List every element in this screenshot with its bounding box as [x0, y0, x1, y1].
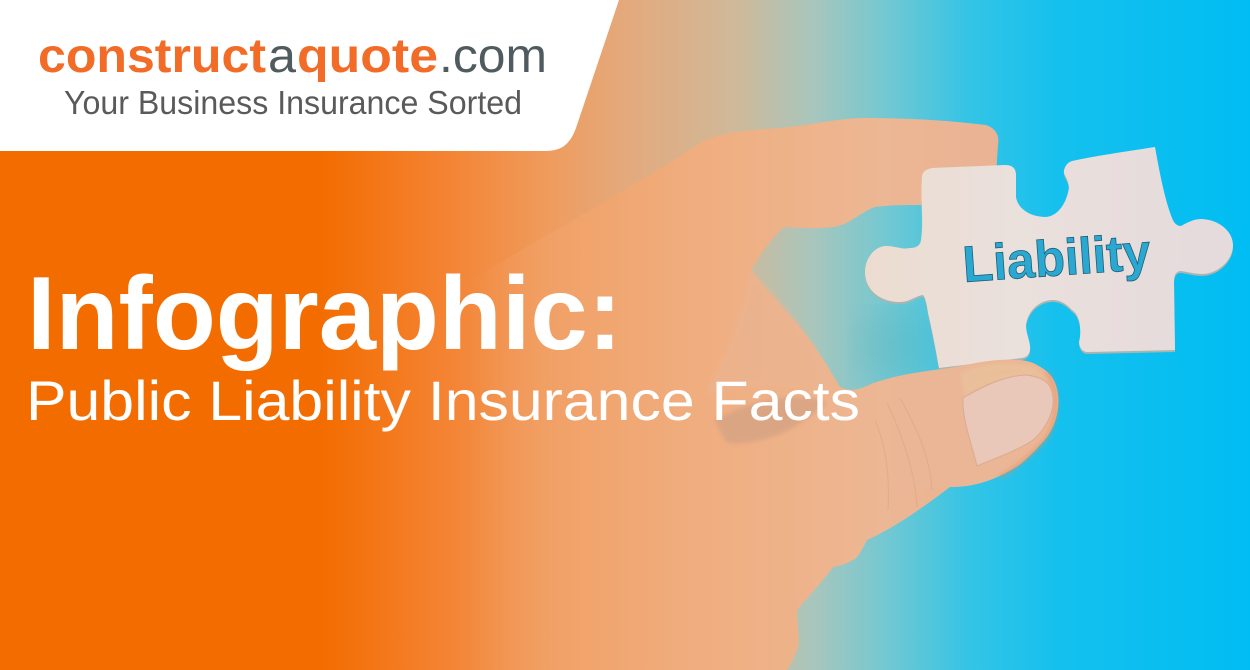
hand silhouette [420, 118, 1058, 670]
fold between fingers [714, 397, 827, 443]
puzzle label: Liability [961, 223, 1153, 293]
photo: hand holding puzzle piece [420, 118, 1233, 670]
white panel shape [0, 0, 619, 151]
subtitle: Public Liability Insurance Facts [26, 369, 860, 432]
thumb creases [875, 398, 932, 510]
puzzle piece [865, 147, 1233, 370]
thumbnail [963, 375, 1053, 466]
thumb [875, 360, 1058, 510]
thumb tip [900, 360, 1058, 487]
shadow behind puzzle piece [855, 311, 935, 379]
logo tagline: Your Business Insurance Sorted [64, 84, 522, 121]
logo wordmark: a [268, 30, 296, 83]
callus above nail [960, 364, 1048, 396]
logo wordmark [38, 30, 547, 83]
logo wordmark: quote [297, 30, 438, 83]
thumb rim [1000, 372, 1056, 477]
puzzle piece edge [865, 149, 1233, 370]
logo wordmark: .com [439, 30, 547, 83]
puzzle piece face [865, 147, 1233, 368]
title: Infographic: [27, 256, 622, 372]
middle finger shading [705, 270, 832, 395]
logo panel [0, 0, 619, 151]
logo wordmark: construct [38, 30, 266, 83]
